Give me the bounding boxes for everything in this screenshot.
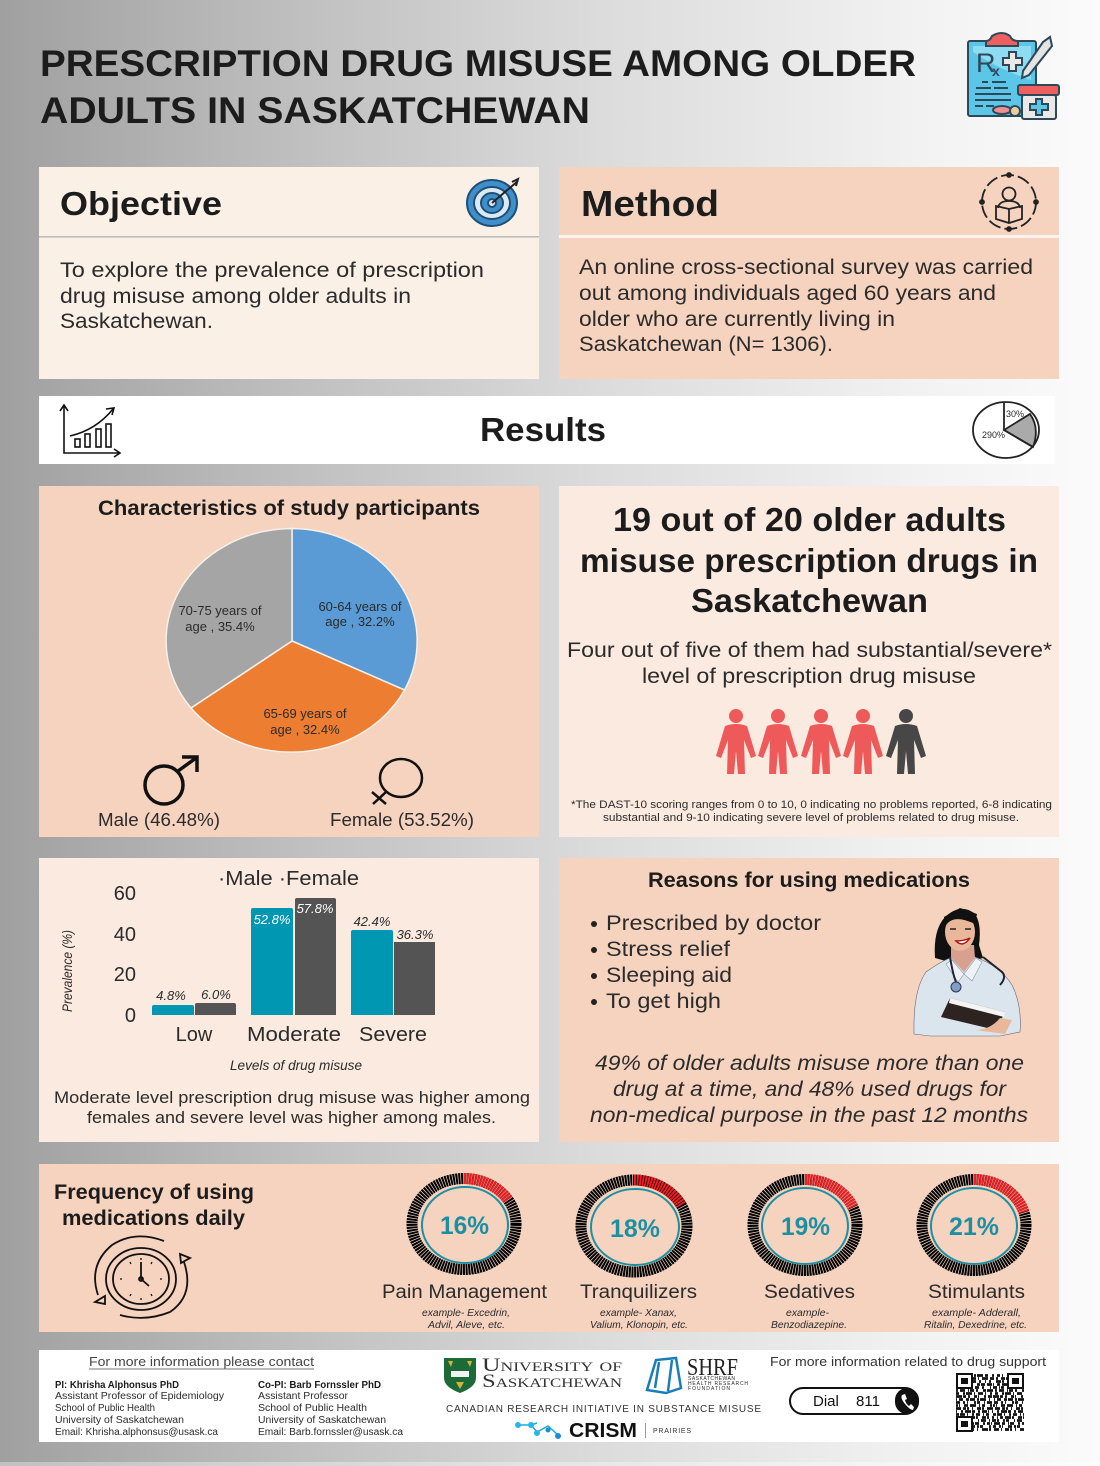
logo: SHRF: HEALTH RESEARCH (688, 1381, 748, 1387)
text: method body: older who are currently living in (579, 308, 895, 331)
button: dial 811: Dial (813, 1393, 839, 1410)
text: canadian research initiative: CANADIAN RESEARCH INITIATIVE IN SUBSTANCE MISUSE (446, 1404, 761, 1415)
text: objective body: To explore the prevalence of prescription (60, 259, 484, 282)
text: principal investigator: University of Saskatchewan (55, 1415, 184, 1426)
logo: CRISM: PRAIRIES (653, 1428, 691, 1435)
pie chart: 65-69 years of (263, 706, 347, 721)
panel: contact footer (39, 1350, 1059, 1442)
title: PRESCRIPTION DRUG MISUSE AMONG OLDER (40, 43, 916, 84)
heading: objective: Objective (60, 185, 222, 222)
panel: results banner (39, 396, 1055, 464)
text: reasons summary (590, 1052, 1029, 1127)
gauge: tranquilizers 18%: Valium, Klonopin, etc. (590, 1320, 688, 1331)
gauge: pain management 16%: Advil, Aleve, etc. (427, 1320, 505, 1331)
text: method body: Saskatchewan (N= 1306). (579, 333, 833, 356)
text: reasons summary: non-medical purpose in the past 12 months (590, 1104, 1029, 1127)
panel: objective (39, 167, 539, 379)
icon: sketched pie: 290% (982, 430, 1005, 440)
logo: SHRF (647, 1355, 748, 1393)
heading: characteristics: Characteristics of study participants (98, 497, 480, 520)
heading: results: Results (480, 411, 606, 448)
gauge: sedatives 19% (753, 1179, 857, 1331)
icon: prescription clipboard: R (976, 48, 996, 78)
heading: 19 out of 20 (580, 501, 1038, 619)
bar chart: ·Male ·Female (218, 868, 359, 890)
icon: sketched pie (973, 402, 1039, 458)
logo: SHRF: FOUNDATION (688, 1386, 730, 1392)
bar chart: 6.0% (201, 987, 231, 1002)
heading: contact: For more information please contact (89, 1354, 314, 1369)
pie chart: 60-64 years of (318, 599, 402, 614)
text: principal investigator: Email: Khrisha.alphonsus@usask.ca (55, 1427, 218, 1438)
text: reasons summary: drug at a time, and 48% used drugs for (613, 1078, 1007, 1101)
icon: five people (716, 709, 926, 774)
QR code (956, 1374, 1024, 1431)
text: bar chart caption: females and severe level was higher among males. (87, 1108, 496, 1127)
panel: frequency of using medications daily (39, 1164, 1059, 1332)
text: co-principal investigator: School of Public Health (258, 1403, 367, 1414)
text: objective body: Saskatchewan. (60, 310, 213, 333)
button: dial 811 (790, 1388, 919, 1414)
text: reasons summary: 49% of older adults misuse more than one (595, 1052, 1024, 1075)
gauge: sedatives 19%: example- (786, 1308, 830, 1319)
panel: characteristics of study participants (39, 486, 539, 837)
gauge: stimulants 21% (922, 1179, 1027, 1331)
bar chart: Prevalence (%) (59, 930, 75, 1012)
icon: prescription clipboard: x (992, 63, 1000, 79)
bar chart: 4.8% (156, 988, 186, 1003)
footnote: substantial and 9-10 indicating severe level of problems related to drug misuse. (603, 812, 1019, 824)
pie chart: age , 35.4% (185, 619, 255, 634)
gauge: sedatives 19%: Benzodiazepine. (771, 1320, 847, 1331)
bar chart: 0 (125, 1005, 136, 1027)
text: co-principal investigator: Co-PI: Barb Fornssler PhD (258, 1380, 381, 1391)
logo: SHRF: SASKATCHEWAN (688, 1376, 735, 1382)
pie chart: 70-75 years of (178, 603, 262, 618)
panel: reasons for using medications (559, 858, 1059, 1142)
bar chart: Moderate (247, 1024, 341, 1046)
text: method body: An online cross-sectional survey was carried (579, 256, 1033, 279)
list: reasons: Stress relief (606, 938, 730, 961)
text: principal investigator: School of Public Health (55, 1403, 155, 1414)
text: principal investigator: Assistant Professor of Epidemiology (55, 1391, 224, 1402)
gauge: stimulants 21%: 21% (949, 1213, 999, 1241)
icon: clock with cycle arrows (95, 1236, 190, 1318)
gauge: tranquilizers 18%: 18% (610, 1215, 660, 1243)
footnote (571, 799, 1052, 824)
icon: target (467, 179, 518, 226)
gauge: sedatives 19%: Sedatives (764, 1282, 855, 1303)
heading: frequency: Frequency of using (54, 1181, 254, 1204)
icon: growth chart (60, 405, 120, 457)
text: bar chart caption: Moderate level prescription drug misuse was higher among (54, 1088, 530, 1107)
bar chart: 60 (114, 883, 136, 905)
heading: method: Method (581, 183, 719, 224)
list: reasons: To get high (606, 990, 721, 1013)
panel: key finding (559, 486, 1059, 837)
gauge: tranquilizers 18%: example- Xanax, (600, 1308, 677, 1319)
text: co-principal investigator: Email: Barb.fornssler@usask.ca (258, 1427, 403, 1438)
text: principal investigator (55, 1380, 224, 1438)
icon: doctor (914, 908, 1020, 1036)
label: male: Male (46.48%) (98, 810, 220, 830)
gauge: stimulants 21%: Stimulants (928, 1282, 1025, 1303)
icon: female symbol (372, 759, 422, 804)
pie chart (166, 528, 417, 752)
icon: prescription clipboard (968, 33, 1059, 119)
gauge: pain management 16%: Pain Management (382, 1282, 548, 1303)
logo: university of saskatchewan (444, 1355, 623, 1393)
heading: 19 out of 20: misuse prescription drugs in (580, 542, 1038, 579)
heading: 19 out of 20: 19 out of 20 older adults (613, 501, 1006, 538)
bar chart: 57.8% (297, 901, 333, 916)
bar chart: 52.8% (254, 912, 290, 927)
panel: method (559, 167, 1059, 379)
gauge: stimulants 21%: example- Adderall, (932, 1308, 1021, 1319)
icon: reader in cycle (980, 173, 1038, 231)
logo: CRISM: CRISM (569, 1420, 637, 1442)
icon: male symbol (145, 757, 197, 804)
text: drug support: For more information related to drug support (770, 1354, 1046, 1369)
title (40, 43, 916, 131)
logo: university of saskatchewan: Saskatchewan (482, 1371, 623, 1392)
text: method body (579, 256, 1033, 356)
text: four out of five: level of prescription drug misuse (642, 665, 976, 688)
bar chart: Low (176, 1024, 213, 1046)
text: method body: out among individuals aged 60 years and (579, 282, 996, 305)
bar chart: 36.3% (397, 927, 433, 942)
button: dial 811: 811 (856, 1393, 880, 1410)
list: reasons: Prescribed by doctor (606, 912, 821, 935)
text: co-principal investigator (258, 1380, 403, 1438)
bar chart (59, 868, 435, 1073)
pie chart: age , 32.4% (270, 722, 340, 737)
heading: frequency (54, 1181, 254, 1230)
text: objective body: drug misuse among older adults in (60, 285, 411, 308)
gauge: sedatives 19%: 19% (781, 1213, 830, 1241)
gauge: pain management 16%: 16% (440, 1212, 489, 1240)
bar chart: 40 (114, 924, 136, 946)
label: female: Female (53.52%) (330, 810, 474, 830)
text: principal investigator: PI: Khrisha Alphonsus PhD (55, 1380, 179, 1391)
bar chart: 42.4% (354, 914, 390, 929)
text: four out of five: Four out of five of them had substantial/severe* (567, 639, 1052, 662)
bar chart: Levels of drug misuse (230, 1057, 362, 1073)
list: reasons (591, 912, 821, 1013)
gauge: stimulants 21%: Ritalin, Dexedrine, etc. (924, 1320, 1027, 1331)
gauge: pain management 16% (382, 1178, 548, 1331)
heading: frequency: medications daily (62, 1207, 245, 1230)
text: bar chart caption (54, 1088, 530, 1127)
logo: university of saskatchewan: University of (482, 1355, 622, 1376)
text: co-principal investigator: Assistant Professor (258, 1391, 349, 1402)
gauge: pain management 16%: example- Excedrin, (422, 1308, 510, 1319)
text: objective body (60, 259, 484, 333)
icon: sketched pie: 30% (1006, 409, 1024, 419)
text: co-principal investigator: University of Saskatchewan (258, 1415, 386, 1426)
panel: prevalence bar chart (39, 858, 539, 1142)
heading: 19 out of 20: Saskatchewan (691, 582, 928, 619)
footnote: *The DAST-10 scoring ranges from 0 to 10, 0 indicating no problems reported, 6-8 indicating (571, 799, 1052, 811)
gauge: tranquilizers 18% (580, 1180, 697, 1331)
gauge: tranquilizers 18%: Tranquilizers (580, 1282, 697, 1303)
title: ADULTS IN SASKATCHEWAN (40, 90, 590, 131)
list: reasons: Sleeping aid (606, 964, 732, 987)
bar chart: Severe (359, 1024, 427, 1046)
logo: SHRF: SHRF (687, 1355, 738, 1381)
bar chart: 20 (114, 964, 136, 986)
pie chart: age , 32.2% (325, 614, 395, 629)
logo: CRISM (515, 1420, 691, 1442)
heading: reasons: Reasons for using medications (648, 869, 970, 892)
text: four out of five (567, 639, 1052, 688)
